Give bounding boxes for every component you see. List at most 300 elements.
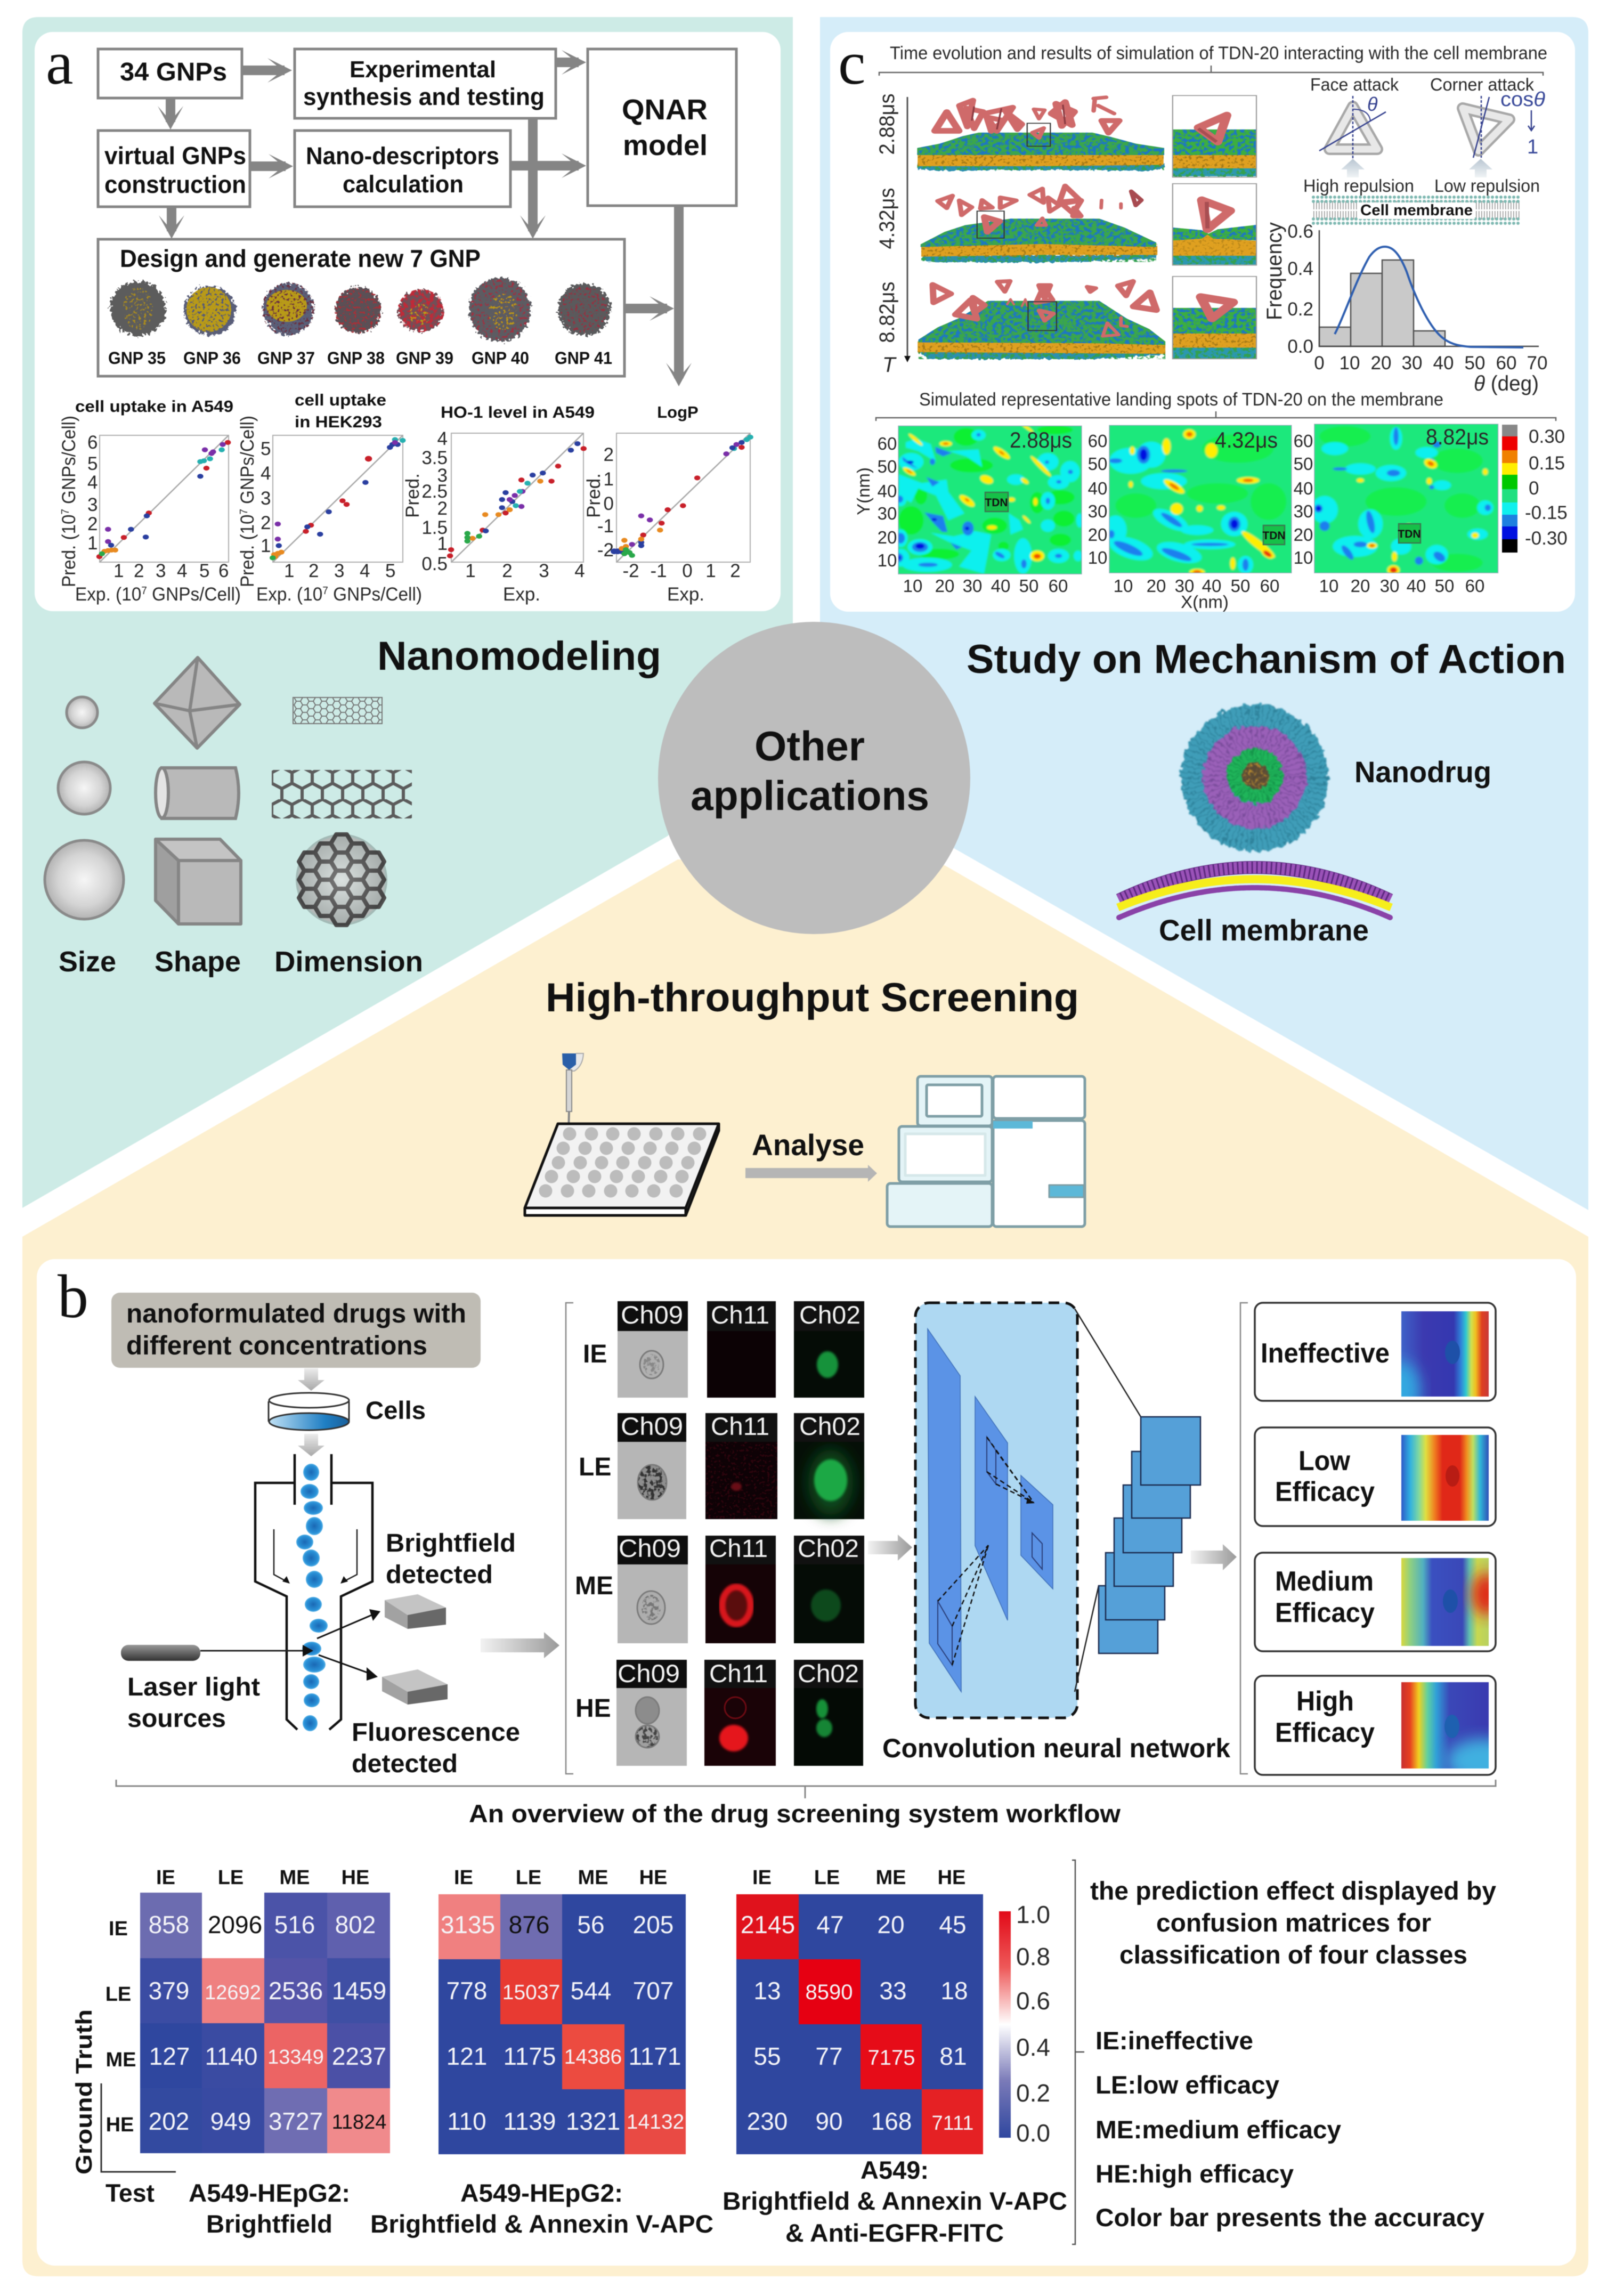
- cell image grid: ME: [575, 1572, 613, 1600]
- confusion matrix: A549-HEpG2 brightfield: 127: [149, 2042, 190, 2070]
- diagram: face attack: High repulsion: [1303, 176, 1414, 196]
- scatter plot: cell uptake in HEK293: GNPs/Cell): [328, 584, 422, 605]
- scatter plot: cell uptake in A549: 3: [87, 494, 98, 515]
- scatter plot: cell uptake in HEK293: cell uptake: [295, 391, 386, 409]
- confusion matrix: A549-HEpG2 brightfield and Annexin V-APC: HE: [639, 1867, 667, 1889]
- convolution neural network diagram: Convolution neural network: [882, 1733, 1230, 1763]
- class: high efficacy: High: [1296, 1686, 1354, 1717]
- confusion matrix axes: ME: [105, 2049, 136, 2071]
- heat map axis labels: Y(nm): [854, 467, 873, 515]
- heat map axis labels: 50: [878, 457, 897, 476]
- channel header labels: Ch09: [618, 1659, 680, 1687]
- heat map axis labels: 50: [1294, 454, 1313, 474]
- scatter plot: cell uptake in HEK293: 2: [309, 561, 319, 581]
- diagram: corner attack: cosθ: [1500, 88, 1545, 111]
- flow box labels: QNAR: [622, 94, 708, 126]
- heat map axis labels: 10: [1114, 576, 1133, 596]
- scatter plot: cell uptake in A549: 2: [134, 561, 144, 581]
- flow box labels: [104, 56, 708, 272]
- channel header labels: Ch09: [621, 1412, 683, 1440]
- dimension column: nanotube, graphene, fullerene: [272, 697, 423, 978]
- particle labels: GNP 37: [257, 348, 315, 368]
- icon: cell dish: [269, 1393, 349, 1430]
- histogram: frequency vs theta: 0.2: [1287, 299, 1313, 320]
- flow cell diagram: detected: [386, 1561, 493, 1589]
- scatter plot: cell uptake in A549: 5: [87, 453, 98, 474]
- scatter plot: cell uptake in HEK293: 7: [238, 509, 250, 515]
- channel header labels: Ch11: [711, 1301, 769, 1329]
- scatter plot: cell uptake in HEK293: [237, 391, 422, 605]
- flow cell diagram: sources: [127, 1705, 226, 1733]
- confusion matrix description: confusion matrices for: [1156, 1909, 1431, 1937]
- flow box labels: Experimental: [350, 56, 496, 83]
- scatter plot: HO-1 level in A549: 3: [437, 465, 448, 486]
- confusion matrix: A549-HEpG2 brightfield and Annexin V-APC: [370, 1867, 713, 2238]
- channel Ch09 brightfield images: [616, 1301, 688, 1766]
- heat map 4.32 us: 4.32μs: [1215, 427, 1278, 452]
- scatter plot: cell uptake in HEK293: Pred. (10: [237, 510, 258, 587]
- heat map axis labels: 50: [1231, 576, 1250, 596]
- histogram: frequency vs theta: θ (deg): [1474, 372, 1539, 395]
- heat map axis labels: 50: [1088, 454, 1107, 474]
- heat map 2.88 us: TDN: [985, 497, 1008, 509]
- diagram: corner attack: 1: [1527, 136, 1538, 158]
- heat map 4.32 us: TDN: [1262, 530, 1286, 542]
- heat map colour bar: [1502, 425, 1568, 553]
- heat map axis labels: 20: [878, 528, 897, 547]
- cell image grid: LE: [579, 1453, 611, 1481]
- confusion matrix: A549 brightfield, Annexin V-APC and Anti-EGFR-FITC: 13: [753, 1977, 781, 2005]
- confusion matrix: A549-HEpG2 brightfield: 2536: [269, 1977, 323, 2005]
- confusion matrix: A549-HEpG2 brightfield: Brightfield: [206, 2210, 332, 2238]
- diagram: face attack: θ: [1367, 93, 1378, 115]
- scatter plot: cell uptake in HEK293: 4: [360, 561, 370, 581]
- heat map axis labels: 30: [1294, 501, 1313, 521]
- confusion matrix: A549-HEpG2 brightfield: 11824: [332, 2111, 386, 2133]
- confusion matrix: A549-HEpG2 brightfield and Annexin V-APC: ME: [578, 1867, 608, 1889]
- confusion matrix description: [1090, 1877, 1496, 1969]
- flow box labels: calculation: [343, 171, 464, 198]
- class abbreviations legend: HE:high efficacy: [1095, 2160, 1294, 2188]
- detector: fluorescence: [382, 1669, 448, 1705]
- histogram: frequency vs theta: 10: [1340, 353, 1360, 374]
- label: nanodrug: Nanodrug: [1354, 755, 1491, 789]
- arrow to cell images: [481, 1632, 559, 1658]
- scatter plot: cell uptake in A549: 7: [141, 585, 147, 597]
- channel header labels: Ch02: [799, 1301, 861, 1329]
- scatter plot: HO-1 level in A549: 3.5: [421, 448, 448, 468]
- scatter plot: LogP: Pred.: [583, 473, 604, 518]
- channel Ch02 fluorescence images: [794, 1301, 864, 1766]
- result classes: [1240, 1303, 1521, 1783]
- background sector: mechanism of action: [820, 17, 1588, 1210]
- scatter plot: LogP: 0: [682, 561, 693, 581]
- heat map axis labels: 10: [1088, 548, 1107, 567]
- class: medium efficacy: Medium: [1275, 1566, 1374, 1597]
- scatter plot: cell uptake in A549: 7: [60, 509, 71, 515]
- heat map axis labels: 20: [1147, 576, 1166, 596]
- arrow to classes: [1191, 1544, 1237, 1570]
- flow cell diagram: detected: [352, 1750, 458, 1778]
- cell membrane curve: [1118, 867, 1391, 918]
- central circle: other applications: applications: [691, 772, 929, 819]
- cell image grid: HE: [575, 1694, 611, 1723]
- snapshot 8.82 us: [918, 281, 1165, 359]
- heat map axis labels: 30: [1175, 576, 1194, 596]
- confusion matrix: A549-HEpG2 brightfield: 202: [149, 2107, 189, 2135]
- confusion matrix description: the prediction effect displayed by: [1090, 1877, 1496, 1905]
- cell image grid: [566, 1301, 864, 1774]
- scatter plot: HO-1 level in A549: 2: [502, 561, 513, 581]
- snapshot 4.32 us: [921, 186, 1157, 263]
- heat map axis labels: [854, 431, 1484, 612]
- scatter plot: cell uptake in HEK293: GNPs/Cell): [237, 416, 258, 509]
- confusion matrix: A549 brightfield, Annexin V-APC and Anti-EGFR-FITC: [723, 1867, 1067, 2247]
- scatter plot: cell uptake in HEK293: 1: [284, 561, 294, 581]
- panel b: drug screening workflow and confusion matrices: [37, 1259, 1576, 2266]
- confusion matrix: A549-HEpG2 brightfield and Annexin V-APC: 1175: [504, 2042, 556, 2070]
- confusion matrix: A549-HEpG2 brightfield and Annexin V-APC: LE: [516, 1867, 541, 1889]
- histogram: frequency vs theta: 50: [1465, 353, 1485, 374]
- confusion matrix: A549 brightfield, Annexin V-APC and Anti-EGFR-FITC: & Anti-EGFR-FITC: [785, 2219, 1004, 2247]
- heading: Study on Mechanism of Action: Study on Mechanism of Action: [967, 637, 1566, 682]
- confusion matrix: A549-HEpG2 brightfield and Annexin V-APC: 544: [571, 1977, 611, 2005]
- confusion matrix: A549-HEpG2 brightfield: 379: [149, 1977, 189, 2005]
- confusion matrix: A549-HEpG2 brightfield: 802: [335, 1911, 376, 1938]
- confusion matrix: A549-HEpG2 brightfield: ME: [279, 1867, 310, 1889]
- accuracy colour bar: [999, 1901, 1050, 2147]
- flow box labels: synthesis and testing: [303, 83, 545, 110]
- scatter plot: cell uptake in HEK293: 7: [322, 585, 328, 597]
- nanoformulated drugs box: nanoformulated drugs with: [126, 1299, 466, 1328]
- panel letter c: c: [838, 29, 865, 98]
- scatter plot: HO-1 level in A549: 1: [437, 533, 448, 554]
- class abbreviations legend: Color bar presents the accuracy: [1095, 2203, 1484, 2232]
- scatter plot: LogP: 0: [604, 493, 614, 514]
- heat map colour bar: -0.30: [1525, 528, 1568, 549]
- accuracy colour bar: 0.8: [1016, 1943, 1050, 1970]
- heat map colour bar: -0.15: [1525, 502, 1568, 523]
- time axis: T: [882, 353, 897, 377]
- confusion matrix axes: Ground Truth: [71, 2009, 97, 2175]
- particle GNP 37: [262, 282, 315, 336]
- shape column: octahedron, cylinder, cube: [155, 658, 241, 978]
- confusion matrix: A549-HEpG2 brightfield: 2096: [208, 1911, 262, 1938]
- snapshot 2.88 us: [917, 98, 1164, 171]
- particle labels: [108, 348, 612, 368]
- accuracy colour bar: 0.0: [1016, 2119, 1050, 2147]
- confusion matrix: A549-HEpG2 brightfield and Annexin V-APC: 15037: [502, 1981, 560, 2004]
- accuracy colour bar: 0.2: [1016, 2079, 1050, 2107]
- scatter plot: HO-1 level in A549: HO-1 level in A549: [441, 403, 595, 421]
- flow box labels: Design and generate new 7 GNP: [120, 245, 481, 272]
- confusion matrix axes: [71, 1918, 176, 2207]
- heat map axis labels: 20: [1351, 576, 1370, 596]
- confusion matrix: A549-HEpG2 brightfield and Annexin V-APC: 14132: [627, 2111, 684, 2133]
- class abbreviations legend: [1095, 2026, 1484, 2232]
- cells in flow: [296, 1464, 328, 1731]
- histogram: frequency vs theta: 70: [1527, 353, 1547, 374]
- flow cell diagram: Fluorescence: [352, 1718, 520, 1747]
- arrow: analyse: Analyse: [752, 1128, 864, 1162]
- confusion matrix: A549-HEpG2 brightfield: A549-HEpG2:: [189, 2179, 350, 2207]
- confusion matrix: A549 brightfield, Annexin V-APC and Anti-EGFR-FITC: 8590: [806, 1981, 853, 2004]
- heat map axis labels: 30: [1088, 501, 1107, 521]
- scatter plot: LogP: -2: [622, 561, 639, 581]
- panel letter a: a: [46, 29, 74, 98]
- scatter plot: cell uptake in HEK293: 5: [261, 439, 271, 459]
- flow box labels: model: [623, 129, 708, 161]
- class: low efficacy: [1275, 1435, 1489, 1521]
- confusion matrix: A549-HEpG2 brightfield and Annexin V-APC: 876: [509, 1911, 549, 1938]
- accuracy colour bar: 1.0: [1016, 1901, 1050, 1928]
- heat map colour bar: 0: [1529, 478, 1539, 499]
- scatter plot: cell uptake in A549: Exp. (10: [75, 584, 144, 605]
- heat map axis labels: 60: [878, 434, 897, 453]
- central circle: other applications: [658, 622, 970, 934]
- confusion matrix: A549 brightfield, Annexin V-APC and Anti-EGFR-FITC: 230: [747, 2107, 788, 2135]
- class abbreviations legend: LE:low efficacy: [1095, 2071, 1279, 2099]
- scatter plot: LogP: 1: [604, 469, 614, 490]
- channel header labels: Ch11: [711, 1412, 769, 1440]
- icon: well plate: [525, 1124, 719, 1215]
- down arrows to cells: [298, 1368, 324, 1456]
- particle labels: GNP 41: [555, 348, 612, 368]
- diagram: corner attack: Corner attack: [1430, 75, 1534, 94]
- channel header labels: Ch02: [798, 1534, 859, 1562]
- confusion matrix: A549-HEpG2 brightfield: [140, 1867, 390, 2238]
- confusion matrix: A549-HEpG2 brightfield and Annexin V-APC: 707: [633, 1977, 673, 2005]
- panel letter b: b: [58, 1263, 88, 1331]
- heat map axis labels: 50: [1435, 576, 1454, 596]
- time axis: 8.82μs: [875, 281, 899, 343]
- heat map axis labels: 10: [1319, 576, 1338, 596]
- zoomed inset 4.32 us: [1173, 184, 1256, 265]
- arrow: analyse: [745, 1128, 877, 1182]
- class: low efficacy: Efficacy: [1275, 1476, 1375, 1507]
- confusion matrix: A549 brightfield, Annexin V-APC and Anti-EGFR-FITC: ME: [876, 1867, 906, 1889]
- scatter plot: LogP: Exp.: [667, 584, 704, 605]
- scatter plot: LogP: -2: [597, 540, 614, 561]
- confusion matrix: A549 brightfield, Annexin V-APC and Anti-EGFR-FITC: 90: [815, 2107, 843, 2135]
- diagram: cell membrane band: Cell membrane: [1360, 202, 1473, 219]
- confusion matrix: A549 brightfield, Annexin V-APC and Anti-EGFR-FITC: 55: [753, 2042, 781, 2070]
- heat map 2.88 us: [891, 423, 1083, 575]
- icon: cylinder: [156, 768, 239, 818]
- confusion matrix: A549-HEpG2 brightfield and Annexin V-APC: Brightfield & Annexin V-APC: [370, 2210, 713, 2238]
- heading: Nanomodeling: Nanomodeling: [377, 634, 661, 679]
- heat map colour bar: 0.30: [1529, 426, 1565, 447]
- heat map axis labels: 40: [1088, 478, 1107, 498]
- diagram: corner attack: [1430, 75, 1545, 196]
- scatter plot: cell uptake in HEK293: Exp. (10: [256, 584, 326, 605]
- confusion matrix: A549-HEpG2 brightfield and Annexin V-APC: 121: [447, 2042, 487, 2070]
- confusion matrix: A549-HEpG2 brightfield: 1459: [332, 1977, 386, 2005]
- icon: pipette: [562, 1053, 583, 1132]
- heading: simulation: Time evolution and results of simulation of TDN-20 interacting with the cell membrane: [890, 43, 1547, 63]
- channel Ch11 fluorescence images: [704, 1301, 777, 1766]
- heat map axis labels: 60: [1294, 431, 1313, 451]
- confusion matrix: A549-HEpG2 brightfield and Annexin V-APC: IE: [454, 1867, 473, 1889]
- particle GNP 39: [397, 289, 444, 332]
- panel a: QNAR nanomodeling workflow: [35, 29, 781, 611]
- heat map axis labels: 50: [1019, 576, 1038, 596]
- confusion matrix: A549-HEpG2 brightfield and Annexin V-APC: 56: [577, 1911, 605, 1938]
- time axis: 2.88μs: [875, 94, 899, 155]
- nanoformulated drugs box: different concentrations: [126, 1330, 427, 1360]
- confusion matrix: A549 brightfield, Annexin V-APC and Anti-EGFR-FITC: 33: [879, 1977, 907, 2005]
- scatter plot: cell uptake in HEK293: 2: [261, 513, 271, 533]
- particle GNP 36: [183, 285, 237, 336]
- class: high efficacy: [1276, 1682, 1489, 1769]
- arrow to CNN: [868, 1535, 912, 1561]
- heat map 8.82 us: 8.82μs: [1426, 424, 1489, 449]
- diagram: face attack: [1303, 75, 1414, 196]
- heat map axis labels: 40: [1407, 576, 1426, 596]
- scatter plot: cell uptake in A549: 4: [87, 472, 98, 493]
- channel header labels: Ch02: [798, 1659, 859, 1687]
- confusion matrix: A549-HEpG2 brightfield: 949: [210, 2107, 251, 2135]
- confusion matrix: A549 brightfield, Annexin V-APC and Anti-EGFR-FITC: Brightfield & Annexin V-APC: [723, 2187, 1067, 2215]
- nanodrug micelle: [1181, 704, 1328, 851]
- heat map axis labels: 30: [878, 504, 897, 523]
- scatter plot: cell uptake in A549: 1: [113, 561, 124, 581]
- heat map axis labels: 10: [878, 550, 897, 570]
- scatter plot: cell uptake in A549: 5: [199, 561, 209, 581]
- scatter plot: HO-1 level in A549: 2.5: [421, 481, 448, 502]
- heat map axis labels: 20: [1088, 525, 1107, 545]
- channel header labels: Ch09: [619, 1534, 681, 1562]
- confusion matrix: A549-HEpG2 brightfield: 2237: [332, 2042, 386, 2070]
- flow cell diagram: Brightfield: [386, 1529, 516, 1557]
- scatter plot: HO-1 level in A549: 3: [539, 561, 549, 581]
- confusion matrix axes: Test: [105, 2179, 155, 2207]
- confusion matrix: A549 brightfield, Annexin V-APC and Anti-EGFR-FITC: 7175: [868, 2046, 915, 2070]
- heat map 8.82 us: TDN: [1398, 528, 1421, 540]
- channel header labels: Ch09: [621, 1301, 683, 1329]
- zoomed inset 2.88 us: [1173, 95, 1256, 177]
- time axis: 4.32μs: [875, 188, 899, 249]
- diagram: corner attack: Low repulsion: [1434, 176, 1540, 196]
- heat map axis labels: 40: [1294, 478, 1313, 498]
- laser source: [121, 1645, 200, 1661]
- flow box labels: virtual GNPs: [104, 142, 246, 169]
- accuracy colour bar: 0.6: [1016, 1987, 1050, 2015]
- class abbreviations legend: ME:medium efficacy: [1095, 2115, 1341, 2144]
- confusion matrix: A549 brightfield, Annexin V-APC and Anti-EGFR-FITC: 7111: [932, 2112, 973, 2135]
- scatter plot: cell uptake in A549: GNPs/Cell): [59, 416, 79, 509]
- scatter plot: LogP: -1: [597, 516, 614, 537]
- diagram: cell membrane band: [1313, 197, 1520, 223]
- diagram: face attack: Face attack: [1310, 75, 1399, 94]
- scatter plot: cell uptake in A549: 6: [218, 561, 229, 581]
- histogram: frequency vs theta: 0.4: [1287, 258, 1313, 279]
- heat map axis labels: 10: [903, 576, 922, 596]
- confusion matrix: A549-HEpG2 brightfield and Annexin V-APC: 1171: [629, 2042, 681, 2070]
- icon: octahedron: [155, 658, 240, 748]
- histogram: frequency vs theta: 0: [1314, 353, 1325, 374]
- class: ineffective: Ineffective: [1261, 1338, 1390, 1369]
- class: low efficacy: Low: [1298, 1446, 1351, 1476]
- scatter plot: HO-1 level in A549: 1: [465, 561, 476, 581]
- confusion matrix: A549 brightfield, Annexin V-APC and Anti-EGFR-FITC: 47: [816, 1911, 844, 1938]
- heading: landing spots: Simulated representative landing spots of TDN-20 on the membrane: [919, 390, 1443, 410]
- scatter plot: HO-1 level in A549: 0.5: [421, 554, 448, 574]
- scatter plot: HO-1 level in A549: 4: [574, 561, 585, 581]
- convolution neural network diagram: [882, 1303, 1230, 1763]
- confusion matrix: A549-HEpG2 brightfield: 3727: [269, 2107, 323, 2135]
- confusion matrix: A549 brightfield, Annexin V-APC and Anti-EGFR-FITC: HE: [938, 1867, 965, 1889]
- particle labels: GNP 35: [108, 348, 166, 368]
- scatter plot: cell uptake in HEK293: in HEK293: [295, 412, 382, 431]
- histogram: frequency vs theta: Frequency: [1263, 222, 1286, 320]
- scatter plot: LogP: LogP: [657, 403, 699, 421]
- workflow bracket and caption: An overview of the drug screening system workflow: [469, 1799, 1121, 1828]
- scatter plot: cell uptake in A549: GNPs/Cell): [147, 584, 241, 605]
- flow cell diagram: [121, 1454, 520, 1778]
- flow box labels: Nano-descriptors: [306, 142, 499, 169]
- class: medium efficacy: Efficacy: [1275, 1597, 1375, 1628]
- icon: graphene sheet: [272, 770, 412, 818]
- particle GNP 40: [469, 278, 531, 342]
- legend bracket: [1072, 1860, 1084, 2244]
- scatter plot: HO-1 level in A549: 2: [437, 498, 448, 519]
- confusion matrix: A549 brightfield, Annexin V-APC and Anti-EGFR-FITC: 168: [871, 2107, 912, 2135]
- cell image grid: IE: [583, 1340, 607, 1368]
- workflow bracket and caption: [116, 1780, 1496, 1828]
- confusion matrix: A549 brightfield, Annexin V-APC and Anti-EGFR-FITC: 20: [877, 1911, 905, 1938]
- scatter plot: cell uptake in HEK293: 3: [261, 488, 271, 509]
- scatter plot: HO-1 level in A549: [402, 403, 595, 605]
- confusion matrix axes: LE: [105, 1983, 131, 2006]
- icon: analyser instrument: [887, 1076, 1085, 1227]
- channel header labels: Ch02: [799, 1412, 861, 1440]
- confusion matrix: A549-HEpG2 brightfield: 1140: [205, 2042, 257, 2070]
- heat map axis labels: 40: [878, 481, 897, 501]
- confusion matrix: A549-HEpG2 brightfield: IE: [156, 1867, 175, 1889]
- scatter plot: cell uptake in A549: 6: [87, 432, 98, 453]
- particle labels: GNP 38: [327, 348, 385, 368]
- label: cells: Cells: [366, 1396, 426, 1424]
- flow arrows: [158, 50, 692, 386]
- scatter plot: cell uptake in A549: Pred. (10: [59, 510, 79, 587]
- confusion matrix: A549 brightfield, Annexin V-APC and Anti-EGFR-FITC: LE: [814, 1867, 840, 1889]
- confusion matrix: A549-HEpG2 brightfield and Annexin V-APC: A549-HEpG2:: [460, 2179, 623, 2207]
- particle GNP 41: [558, 283, 610, 336]
- histogram: frequency vs theta: 0.0: [1287, 336, 1313, 357]
- histogram: frequency vs theta: [1263, 221, 1547, 395]
- background sector: high-throughput screening: [22, 859, 1588, 2276]
- heat map axis labels: 20: [1294, 525, 1313, 545]
- heat map axis labels: 40: [1202, 576, 1221, 596]
- heat map axis labels: 40: [991, 576, 1010, 596]
- confusion matrix: A549 brightfield, Annexin V-APC and Anti-EGFR-FITC: A549:: [861, 2156, 929, 2184]
- scatter plot: cell uptake in HEK293: 5: [385, 561, 395, 581]
- scatter plot: cell uptake in HEK293: 1: [261, 536, 271, 556]
- flow cell diagram: Laser light: [127, 1673, 260, 1701]
- class: high efficacy: Efficacy: [1275, 1717, 1375, 1748]
- scatter plot: cell uptake in A549: 2: [87, 514, 98, 534]
- detector: brightfield: [385, 1594, 446, 1629]
- scatter plot: LogP: [583, 403, 753, 605]
- heat map 8.82 us: [1309, 420, 1503, 577]
- panel c: TDN-20 membrane simulation: [830, 29, 1575, 612]
- confusion matrix: A549 brightfield, Annexin V-APC and Anti-EGFR-FITC: 81: [939, 2042, 967, 2070]
- heading: High-throughput Screening: High-throughput Screening: [546, 975, 1079, 1020]
- confusion matrix: A549-HEpG2 brightfield and Annexin V-APC: 110: [447, 2107, 486, 2135]
- histogram: frequency vs theta: 40: [1433, 353, 1454, 374]
- icon: nanotube: [293, 697, 382, 724]
